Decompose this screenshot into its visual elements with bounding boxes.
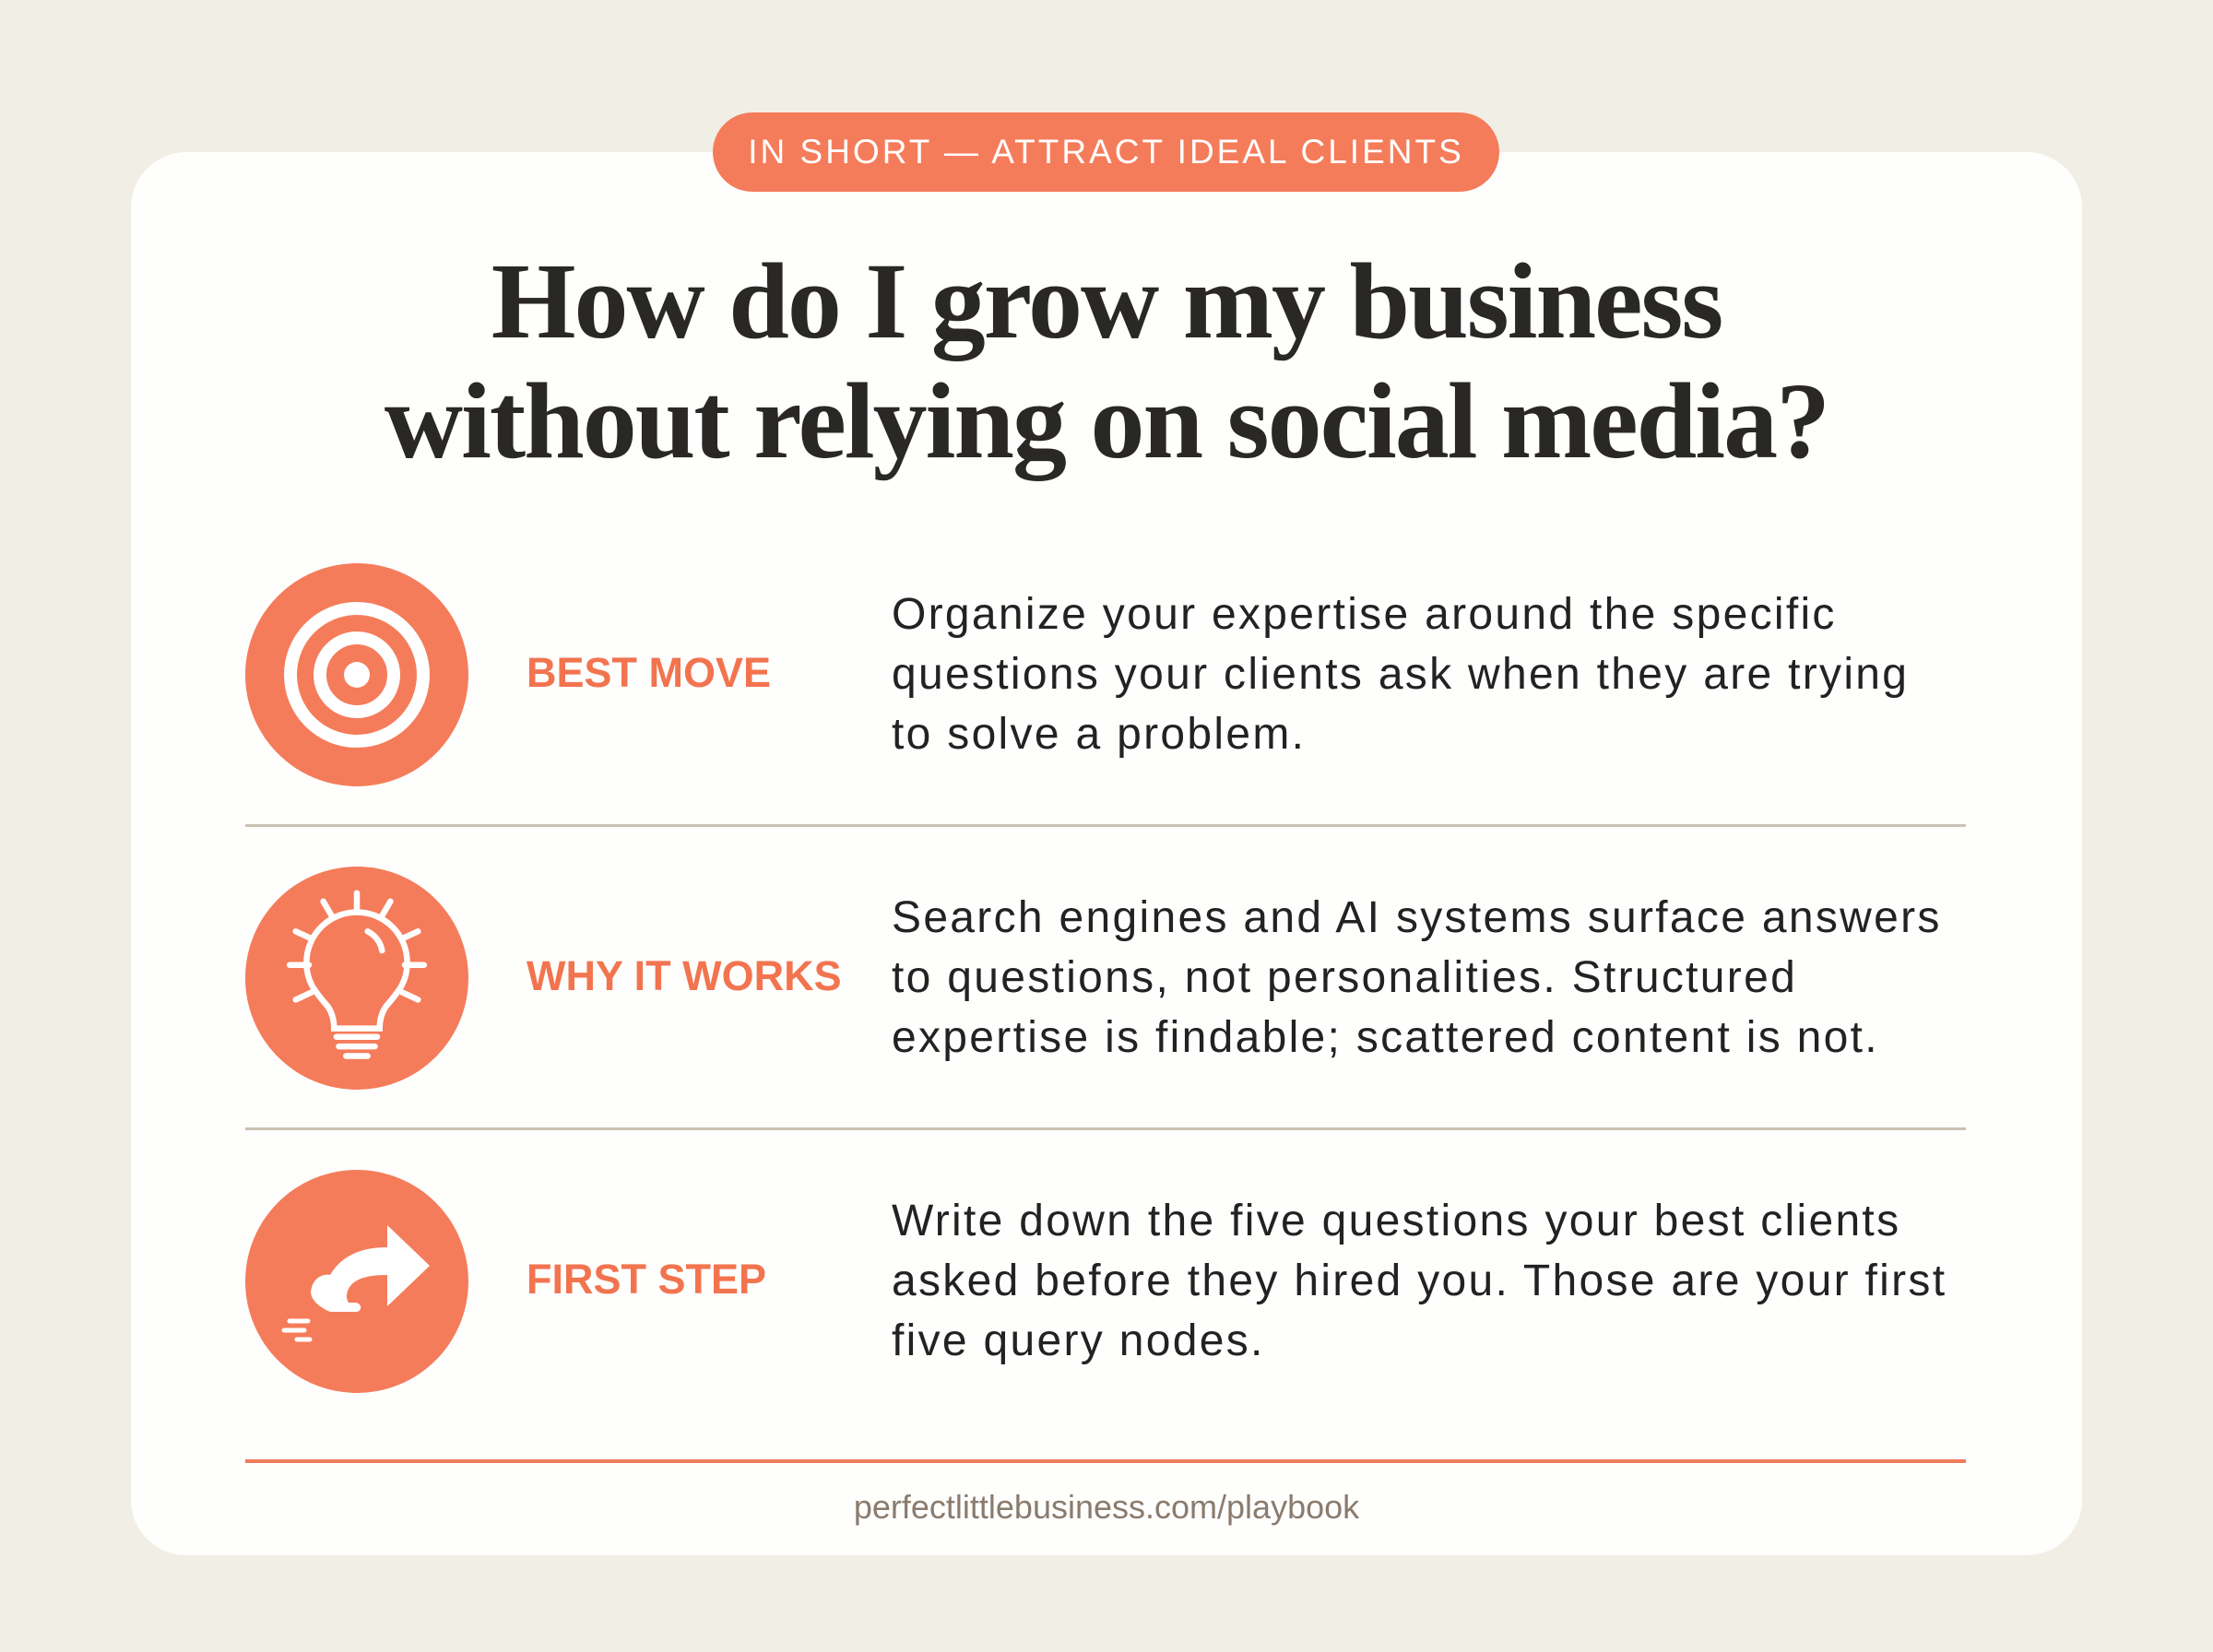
text bbox=[892, 893, 1942, 1062]
pill badge: IN SHORT — ATTRACT IDEAL CLIENTS bbox=[748, 133, 1464, 171]
title bbox=[385, 241, 1828, 481]
text: five query nodes. bbox=[892, 1316, 1265, 1365]
label: BEST MOVE bbox=[527, 649, 771, 696]
text: Organize your expertise around the specific bbox=[892, 590, 1837, 639]
text bbox=[892, 1197, 1947, 1365]
card bbox=[131, 152, 2082, 1555]
title: without relying on social media? bbox=[385, 360, 1828, 481]
icon: target bbox=[245, 563, 468, 786]
text: to questions, not personalities. Structured bbox=[892, 953, 1797, 1002]
label: FIRST STEP bbox=[527, 1256, 766, 1303]
title: How do I grow my business bbox=[491, 241, 1722, 361]
footer url: perfectlittlebusiness.com/playbook bbox=[854, 1488, 1359, 1526]
row: best move bbox=[245, 563, 1909, 786]
pill badge bbox=[713, 112, 1499, 192]
row: why it works bbox=[245, 867, 1942, 1090]
row: first step bbox=[245, 1170, 1947, 1393]
text: to solve a problem. bbox=[892, 710, 1306, 759]
text: questions your clients ask when they are trying bbox=[892, 650, 1909, 699]
text: Write down the five questions your best clients bbox=[892, 1197, 1900, 1245]
footer line bbox=[245, 1459, 1966, 1463]
icon: lightbulb bbox=[245, 867, 468, 1090]
text: Search engines and AI systems surface answers bbox=[892, 893, 1942, 942]
label: WHY IT WORKS bbox=[527, 952, 842, 999]
icon: arrow bbox=[245, 1170, 468, 1393]
text bbox=[892, 590, 1909, 759]
text: expertise is findable; scattered content is not. bbox=[892, 1013, 1879, 1062]
text: asked before they hired you. Those are your first bbox=[892, 1257, 1947, 1305]
